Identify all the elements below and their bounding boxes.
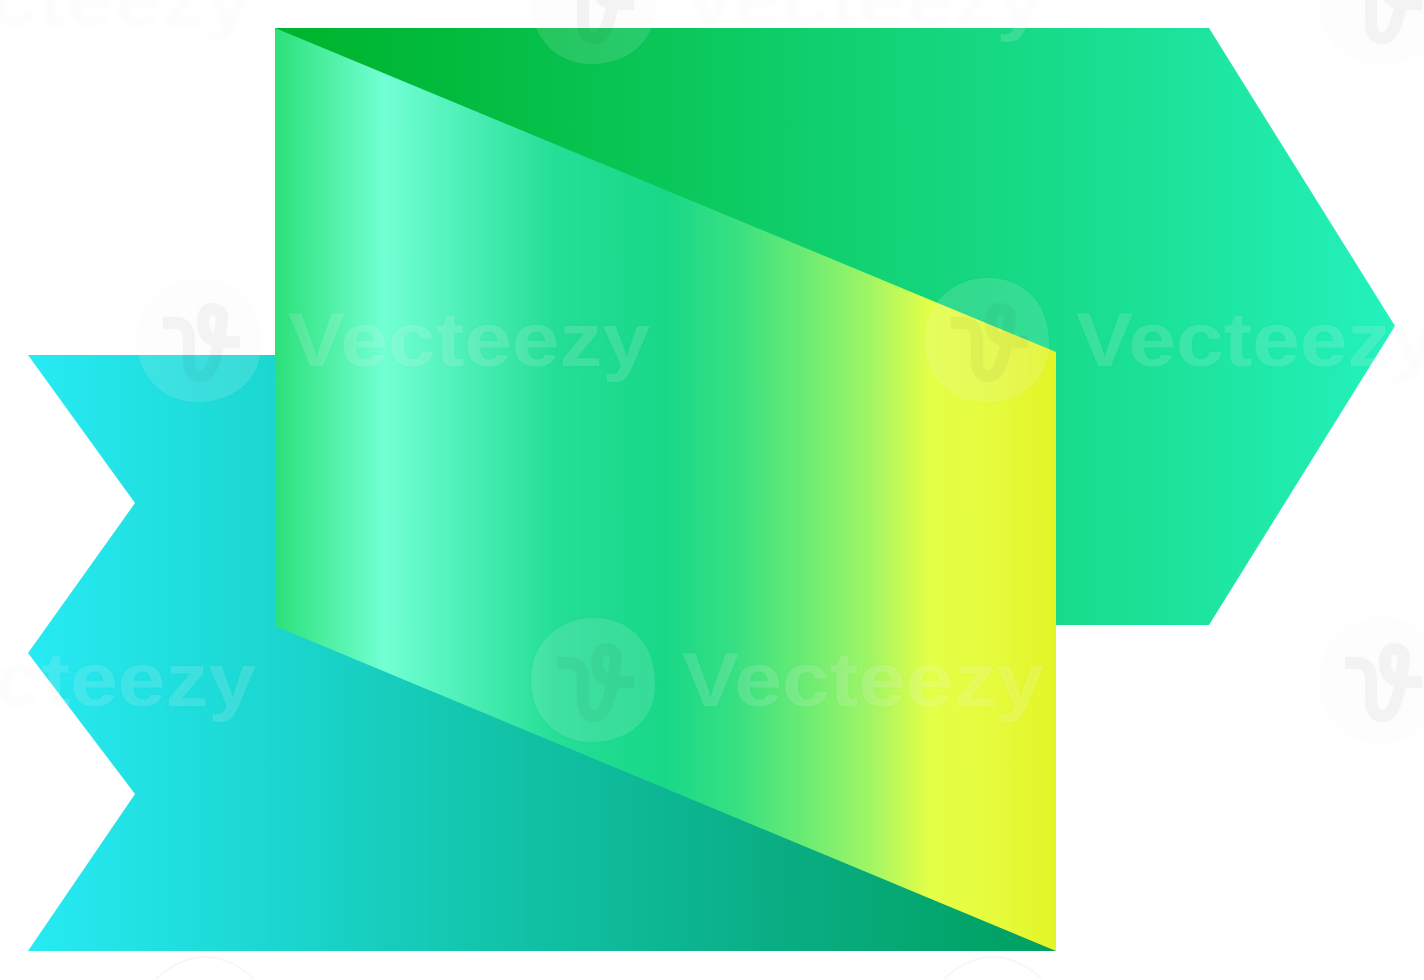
watermark logo top right <box>1319 0 1424 64</box>
watermark row 2 <box>0 618 1424 742</box>
left swallowtail band <box>28 355 1056 951</box>
watermark row 1 <box>137 278 1424 402</box>
watermark logo left <box>137 278 261 402</box>
top arrow band <box>275 28 1395 625</box>
watermark logo centre <box>531 618 655 742</box>
watermark logo arc bottom left <box>156 957 254 979</box>
watermark text right: Vecteezy <box>1076 298 1424 383</box>
watermark logo top centre <box>531 0 655 64</box>
watermark text centre: Vecteezy <box>682 638 1044 723</box>
watermark text left: Vecteezy <box>288 298 650 383</box>
watermark row 3 <box>156 957 1042 979</box>
watermark logo far right <box>1319 618 1424 742</box>
watermark logo right <box>925 278 1049 402</box>
front folded panel <box>275 28 1056 951</box>
watermark row 0 <box>0 0 1424 64</box>
watermark logo arc bottom right <box>944 957 1042 979</box>
